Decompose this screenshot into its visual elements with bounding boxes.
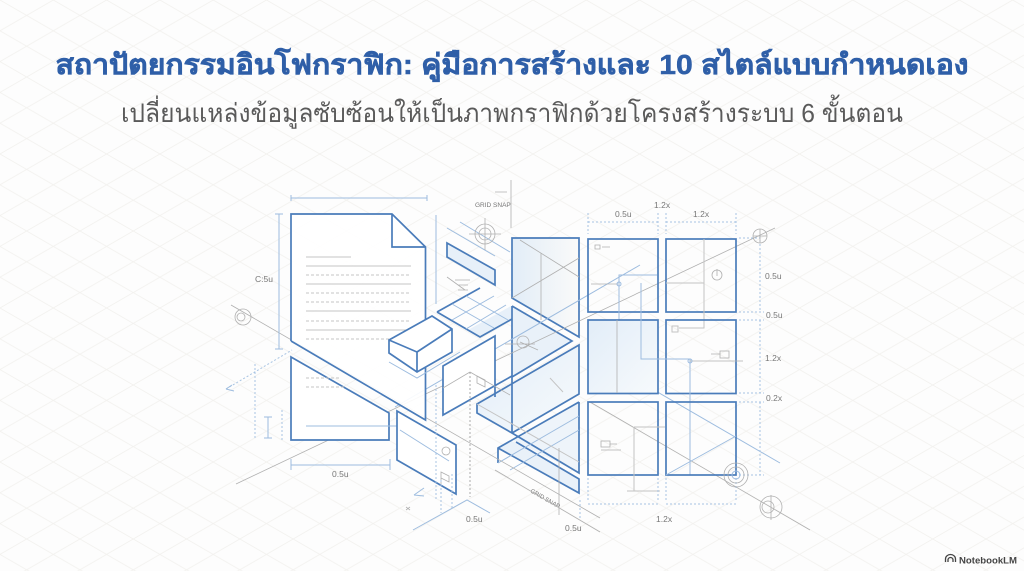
document icon — [291, 214, 426, 420]
middle parallelogram card — [436, 336, 512, 500]
grid cell 2 — [666, 239, 736, 328]
grid cell 1 — [588, 239, 658, 320]
grid cell 3 — [588, 320, 658, 394]
grid dimension labels — [466, 200, 783, 533]
icon: power — [712, 269, 722, 280]
grid dimension labels: 1.2x — [654, 200, 671, 210]
icon: target on shards — [505, 336, 538, 350]
title: สถาปัตยกรรมอินโฟกราฟิก: คู่มือการสร้างและ 10 สไตล์แบบกำหนดเอง — [56, 47, 968, 82]
grid cell 5 — [588, 402, 665, 491]
grid dimension labels: 0.5u — [565, 523, 582, 533]
grid cell 6 — [666, 402, 736, 475]
subtitle: เปลี่ยนแหล่งข้อมูลซับซ้อนให้เป็นภาพกราฟิกด้วยโครงสร้างระบบ 6 ขั้นตอน — [121, 94, 903, 129]
icon: NotebookLM mark — [946, 554, 956, 562]
grid dimension labels: 0.2x — [766, 393, 783, 403]
lower triangle dimension: 0.5u — [332, 469, 349, 479]
document dimension lines: C:5u — [255, 274, 273, 284]
isometric grid diamond — [437, 288, 512, 337]
label: grid snap rotated: GRID SNAP — [529, 489, 561, 510]
lower triangle dimension — [226, 350, 390, 479]
icon: power — [442, 447, 450, 455]
registration marks — [226, 229, 782, 532]
lower triangle panel — [291, 357, 400, 440]
logo: NotebookLM: NotebookLM — [959, 556, 1017, 566]
document dimension lines — [255, 195, 436, 349]
icon: flag — [441, 472, 449, 486]
grid cell 4 — [641, 283, 743, 475]
grid dimension labels: 0.5u — [765, 271, 782, 281]
grid dimension labels: 1.2x — [693, 209, 710, 219]
grid dimension labels: 1.2x — [656, 514, 673, 524]
diagram: exploded blueprint — [226, 180, 810, 533]
upper slanted bar — [447, 222, 510, 290]
grid dimension labels: 1.2x — [765, 353, 782, 363]
long construction axes — [231, 228, 810, 530]
grid snap target: GRID SNAP — [475, 202, 511, 209]
grid dimension labels: 0.5u — [466, 514, 483, 524]
icon: mail — [477, 376, 485, 387]
grid dimension labels: 0.5u — [615, 209, 632, 219]
small 3D box — [389, 316, 460, 378]
center arrow shards — [477, 238, 579, 515]
grid snap target — [469, 180, 511, 250]
panel grid — [588, 239, 743, 491]
grid dimension labels: 0.5u — [766, 310, 783, 320]
lower parallelogram card — [397, 411, 456, 494]
